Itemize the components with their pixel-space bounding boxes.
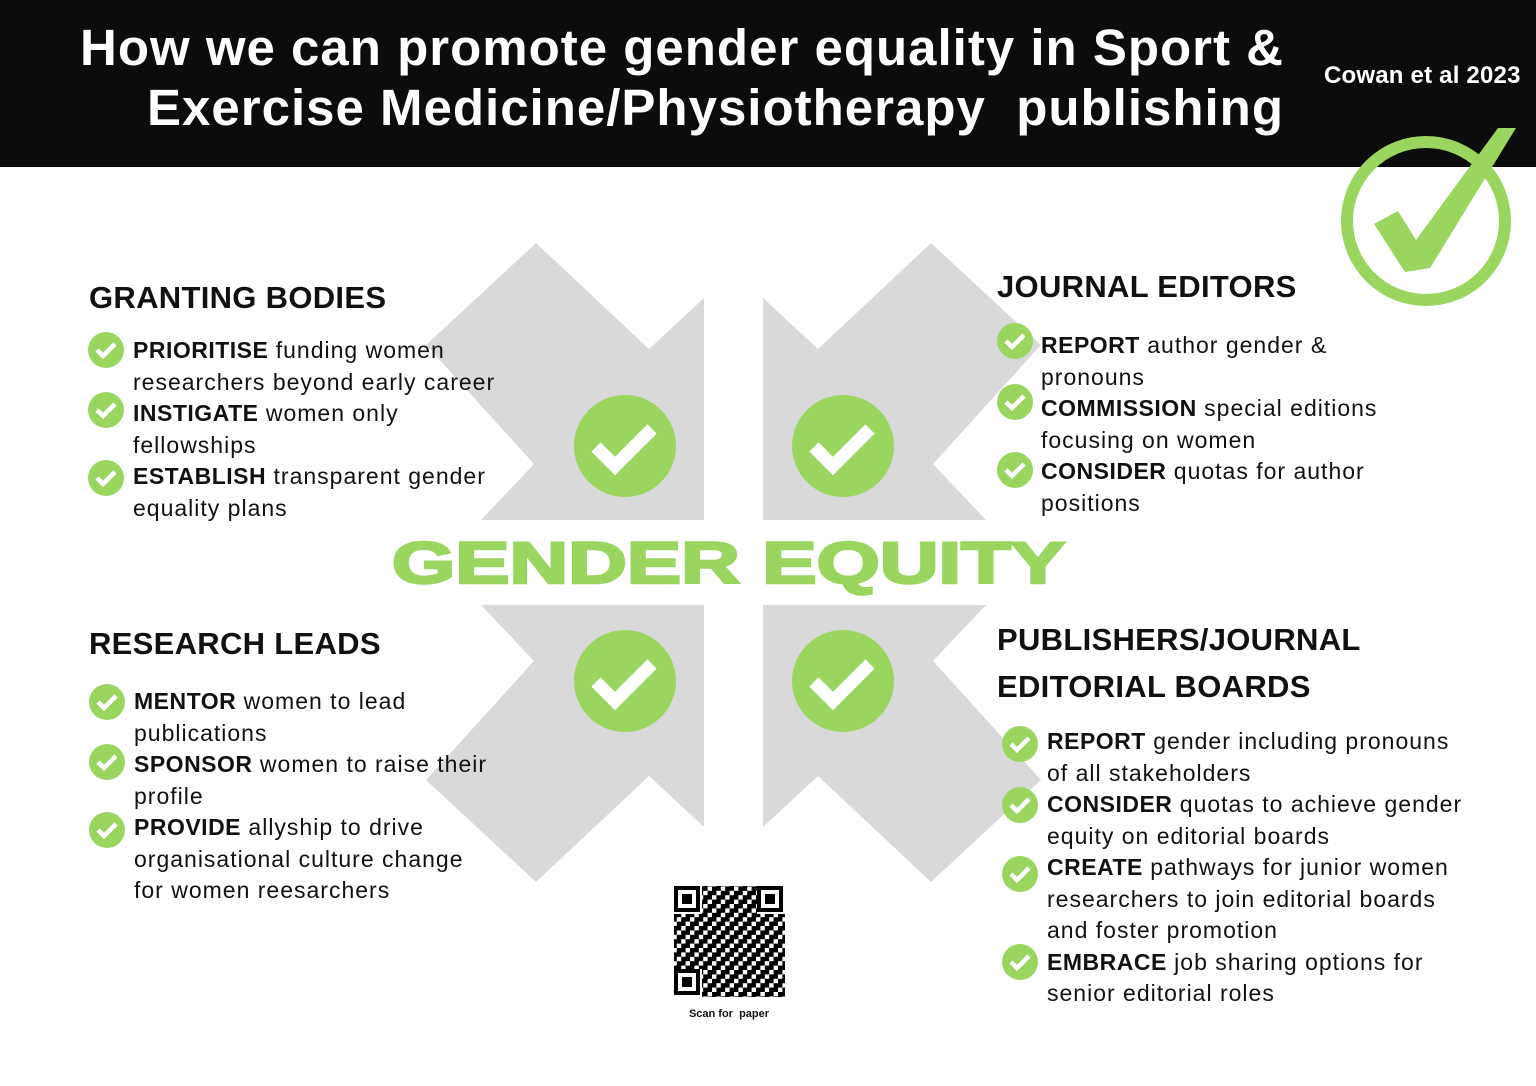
panel: research leads (89, 626, 487, 903)
items: researchers to join editorial boards (1047, 886, 1436, 912)
items: REPORT author gender & (1041, 332, 1327, 358)
citation: Cowan et al 2023 (1324, 62, 1521, 89)
items: equity on editorial boards (1047, 822, 1330, 848)
heading (997, 622, 1361, 704)
arrow top-right (763, 243, 1041, 520)
items: of all stakeholders (1047, 760, 1251, 786)
items: CONSIDER quotas for author (1041, 458, 1365, 484)
items: focusing on women (1041, 426, 1256, 452)
icons (88, 332, 124, 368)
items: senior editorial roles (1047, 980, 1275, 1006)
heading: EDITORIAL BOARDS (997, 669, 1311, 704)
check circle top-right (792, 395, 894, 497)
items: PRIORITISE funding women (133, 337, 445, 363)
panel: publishers / journal editorial boards (997, 622, 1462, 1006)
heading: RESEARCH LEADS (89, 626, 381, 661)
items: pronouns (1041, 364, 1145, 390)
check circle bottom-left (574, 630, 676, 732)
items: CONSIDER quotas to achieve gender (1047, 791, 1462, 817)
heading: PUBLISHERS/JOURNAL (997, 622, 1361, 657)
icons (997, 323, 1033, 359)
arrow bottom-right (763, 605, 1041, 882)
items: and foster promotion (1047, 917, 1278, 943)
icons (89, 684, 125, 720)
gender equity text: GENDER EQUITY (392, 531, 1065, 596)
heading: GRANTING BODIES (89, 280, 386, 315)
items (134, 688, 487, 903)
items: INSTIGATE women only (133, 400, 399, 426)
title: Exercise Medicine/Physiotherapy publishing (147, 79, 1284, 136)
big check icon (1347, 128, 1516, 300)
panel: journal editors (997, 269, 1377, 516)
items (1047, 728, 1462, 1006)
items: COMMISSION special editions (1041, 395, 1377, 421)
header bar (0, 0, 1536, 167)
QR code (674, 886, 785, 1020)
arrow top-left (426, 243, 704, 520)
items: REPORT gender including pronouns (1047, 728, 1449, 754)
items (133, 337, 495, 521)
items: SPONSOR women to raise their (134, 751, 487, 777)
items: equality plans (133, 494, 288, 520)
items: profile (134, 782, 204, 808)
heading: JOURNAL EDITORS (997, 269, 1297, 304)
items: EMBRACE job sharing options for (1047, 948, 1423, 974)
items (1041, 332, 1377, 516)
QR caption: Scan for paper (689, 1008, 769, 1020)
items: PROVIDE allyship to drive (134, 814, 424, 840)
check circle top-left (574, 395, 676, 497)
items: CREATE pathways for junior women (1047, 854, 1449, 880)
check circle bottom-right (792, 630, 894, 732)
items: ESTABLISH transparent gender (133, 463, 486, 489)
items: researchers beyond early career (133, 368, 495, 394)
items: publications (134, 720, 267, 746)
items: fellowships (133, 432, 256, 458)
title: How we can promote gender equality in Sport & (80, 19, 1284, 76)
items: positions (1041, 490, 1141, 516)
icons (1002, 726, 1038, 762)
title (80, 19, 1284, 136)
items: for women reesarchers (134, 877, 390, 903)
panel: granting bodies (88, 280, 495, 521)
arrow bottom-left (426, 605, 704, 882)
items: MENTOR women to lead (134, 688, 406, 714)
items: organisational culture change (134, 846, 463, 872)
